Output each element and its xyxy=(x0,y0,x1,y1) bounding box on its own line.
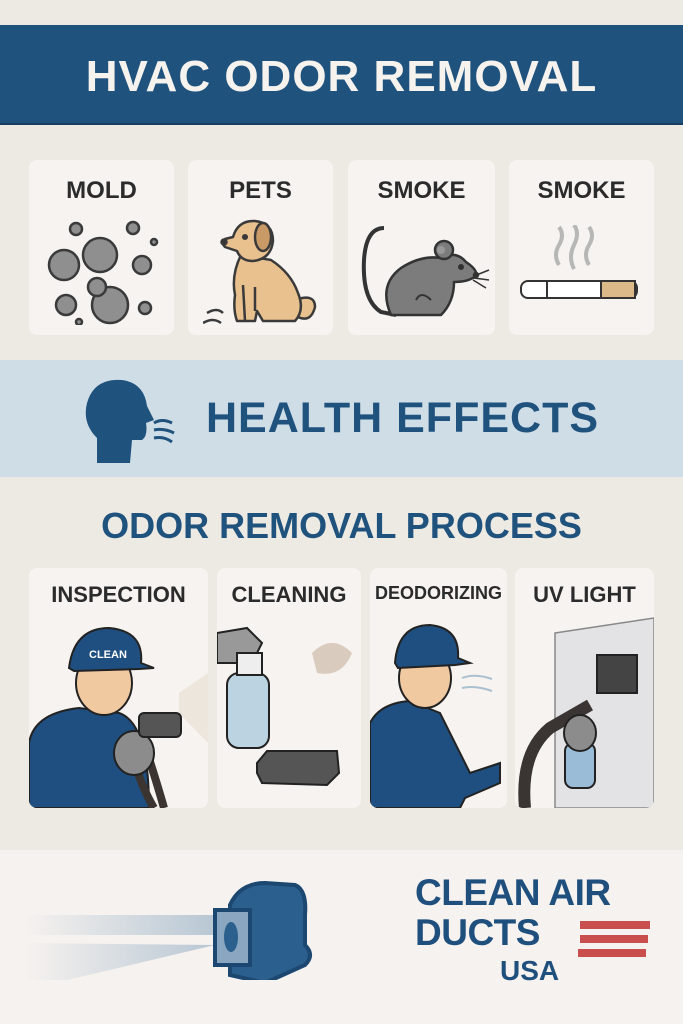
panel: inspection xyxy=(29,568,208,808)
icon: technician with flashlight: CLEAN xyxy=(89,649,127,661)
panel: smoke (rat) xyxy=(348,160,495,335)
footer band xyxy=(0,850,683,1024)
panel: uv light: UV LIGHT xyxy=(533,582,636,607)
logo: clean air ducts usa: USA xyxy=(500,955,559,986)
panel: mold xyxy=(29,160,174,335)
panel: smoke (cigarette): SMOKE xyxy=(537,177,626,204)
icon: head breathing xyxy=(86,380,175,463)
title: HVAC ODOR REMOVAL xyxy=(86,52,597,101)
heading: odor removal process: ODOR REMOVAL PROCESS xyxy=(101,505,582,546)
panel: smoke (rat): SMOKE xyxy=(377,177,466,204)
icon: technician with flashlight xyxy=(29,627,208,808)
panel: smoke (cigarette) xyxy=(509,160,654,335)
panel: deodorizing xyxy=(370,568,507,808)
panel: cleaning: CLEANING xyxy=(232,582,346,607)
icon: dog xyxy=(203,220,316,324)
panel: cleaning xyxy=(217,568,361,808)
panel: uv light xyxy=(515,568,654,808)
icon: mold spores xyxy=(48,220,158,325)
panel: deodorizing: DEODORIZING xyxy=(375,583,502,603)
logo: clean air ducts usa: DUCTS xyxy=(415,912,540,953)
icon: cigarette xyxy=(520,225,638,299)
icon: technician smelling xyxy=(370,624,501,808)
icon: rat xyxy=(362,226,490,317)
panel: inspection: INSPECTION xyxy=(51,582,186,607)
panel: pets: PETS xyxy=(229,177,292,204)
panel: health effects band xyxy=(0,360,683,477)
icon: uv unit with hose xyxy=(518,617,654,808)
logo: clean air ducts usa xyxy=(415,872,650,986)
icon: spray bottle and sponge xyxy=(217,626,352,786)
logo: clean air ducts usa: CLEAN AIR xyxy=(415,872,611,913)
heading: health effects: HEALTH EFFECTS xyxy=(206,394,599,442)
panel: pets xyxy=(188,160,333,335)
icon: air purifier with beams xyxy=(50,881,312,980)
panel: mold: MOLD xyxy=(66,177,137,204)
title bar xyxy=(0,25,683,125)
